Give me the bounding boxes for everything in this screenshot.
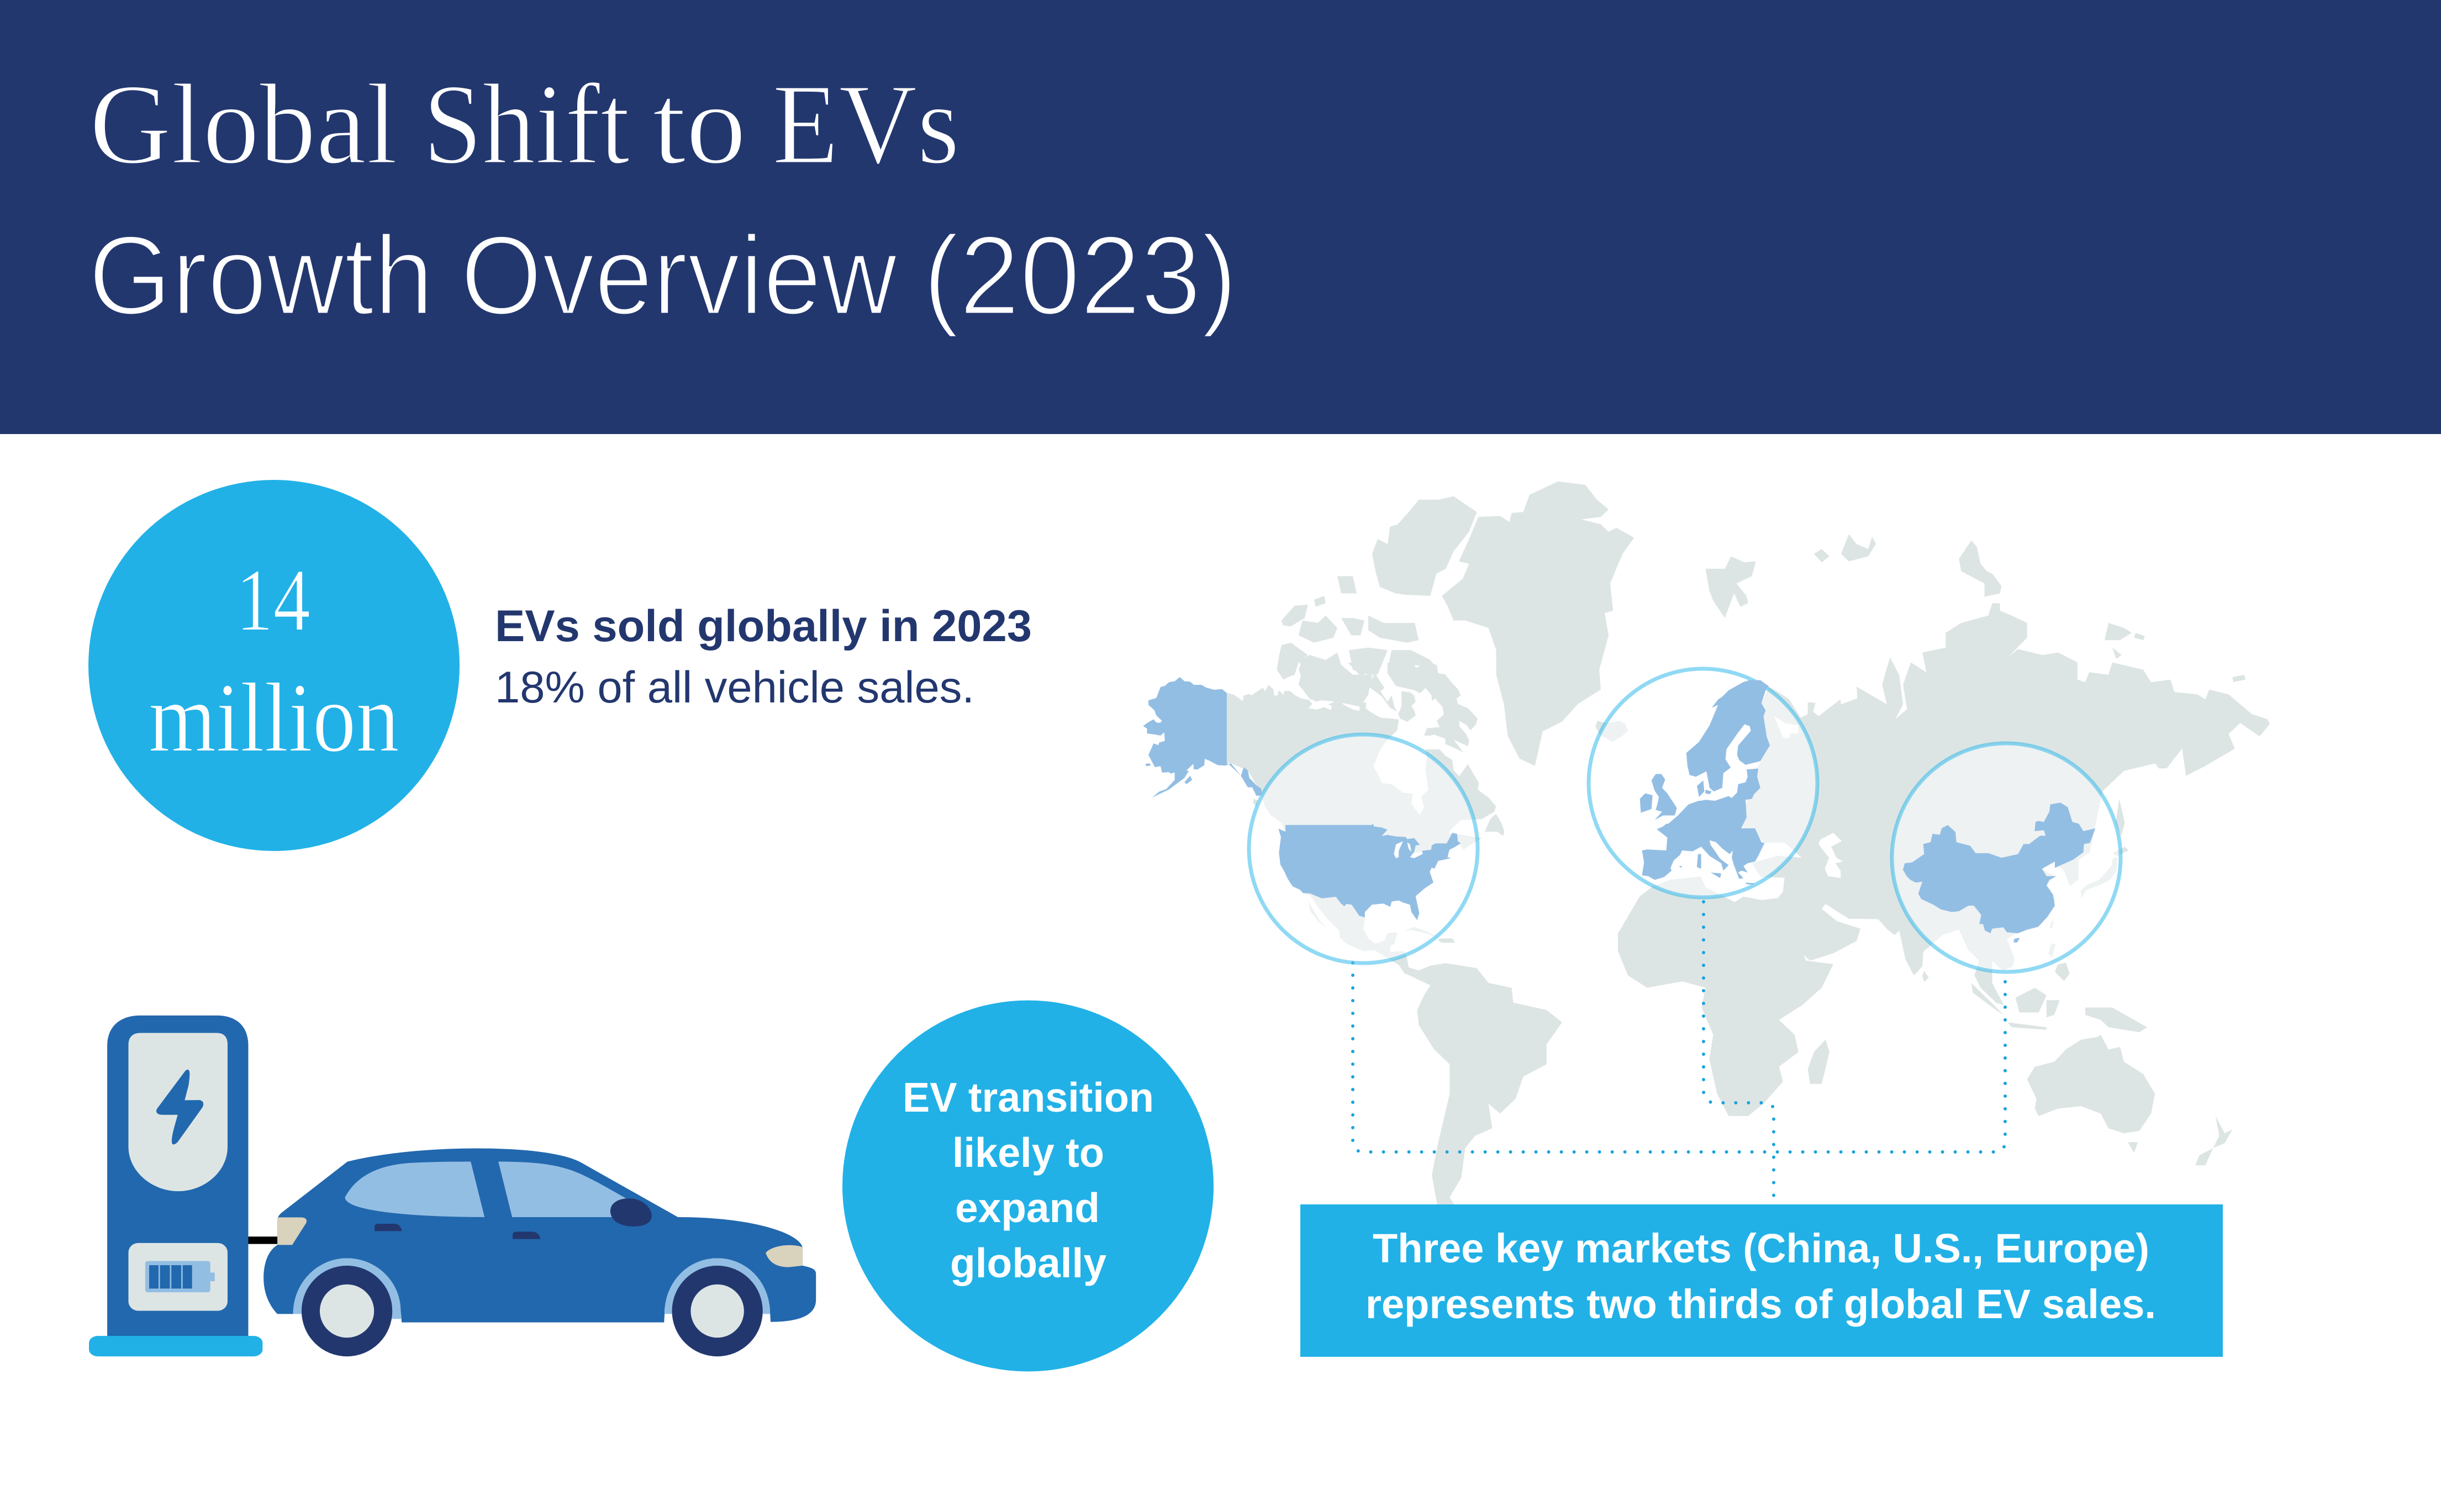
icon: lightning bolt bbox=[156, 1070, 203, 1144]
title: Global Shift to EVs: EVs bbox=[772, 61, 959, 188]
market circle: United States bbox=[1249, 734, 1478, 963]
icon: battery bbox=[145, 1261, 215, 1292]
title: Global Shift to EVs: to bbox=[652, 61, 746, 188]
title: Growth Overview (2023) bbox=[88, 213, 1237, 339]
callout box: three key markets: Three key markets (China, U.S., Europe) bbox=[1373, 1225, 2149, 1271]
title: Growth Overview (2023): Growth bbox=[88, 213, 434, 339]
title: Growth Overview (2023): (2023) bbox=[923, 213, 1237, 339]
circle callout: EV transition likely to expand globally: expand bbox=[955, 1185, 1100, 1231]
callout box: three key markets: represents two thirds of global EV sales. bbox=[1366, 1281, 2156, 1327]
stat circle: 14 million bbox=[88, 480, 460, 851]
rear window bbox=[345, 1162, 484, 1217]
stat circle: 14 million: 14 bbox=[236, 551, 310, 650]
stat description text: 18% of all vehicle sales. bbox=[495, 663, 974, 712]
charging station body bbox=[107, 1016, 248, 1339]
market circle: China bbox=[1892, 743, 2121, 972]
side mirror bbox=[610, 1198, 652, 1226]
circle callout: EV transition likely to expand globally: globally bbox=[950, 1240, 1106, 1286]
front wheel bbox=[672, 1266, 763, 1356]
station battery panel bbox=[129, 1243, 228, 1311]
circle callout: EV transition likely to expand globally: EV transition bbox=[903, 1074, 1154, 1120]
title: Global Shift to EVs: Global bbox=[89, 61, 398, 188]
front window bbox=[498, 1162, 629, 1217]
stat description text: EVs sold globally in 2023 bbox=[495, 601, 1032, 651]
circle callout: EV transition likely to expand globally: likely to bbox=[952, 1129, 1104, 1176]
market circle: Europe bbox=[1589, 669, 1817, 897]
highlighted region: United States and Alaska bbox=[1143, 677, 1461, 920]
title: Global Shift to EVs: Shift bbox=[423, 61, 630, 188]
car body bbox=[263, 1148, 816, 1323]
stat circle: 14 million: million bbox=[149, 663, 399, 773]
world map bbox=[1143, 482, 2270, 1210]
tail light bbox=[277, 1217, 307, 1245]
door handles bbox=[375, 1224, 540, 1239]
highlighted region: Europe bbox=[1640, 680, 1770, 885]
title: Growth Overview (2023): Overview bbox=[461, 213, 898, 339]
station screen panel bbox=[129, 1033, 228, 1191]
dotted connector lines from market circles to callout bbox=[1353, 902, 2005, 1198]
map: gray Iceland, White Sea and Caspian Sea bbox=[1595, 716, 1843, 878]
header banner bbox=[0, 0, 2441, 434]
station base bbox=[89, 1336, 262, 1356]
head light bbox=[766, 1245, 803, 1267]
circle callout: EV transition likely to expand globally bbox=[842, 1001, 1214, 1372]
wheel arches bbox=[293, 1259, 770, 1319]
title: Global Shift to EVs bbox=[89, 61, 959, 188]
map: gray East Asian islands bbox=[1922, 799, 2128, 982]
stat description text bbox=[495, 601, 1032, 712]
map: gray North America bbox=[1227, 663, 1504, 979]
callout box: three key markets bbox=[1300, 1204, 2223, 1357]
rear wheel bbox=[302, 1266, 392, 1356]
charging cable bbox=[248, 1236, 279, 1244]
illustration: charging station and electric car bbox=[89, 1016, 816, 1356]
map: gray landmasses traced in overview coordinates bbox=[1277, 482, 2270, 1210]
highlighted region: China bbox=[1903, 802, 2095, 943]
